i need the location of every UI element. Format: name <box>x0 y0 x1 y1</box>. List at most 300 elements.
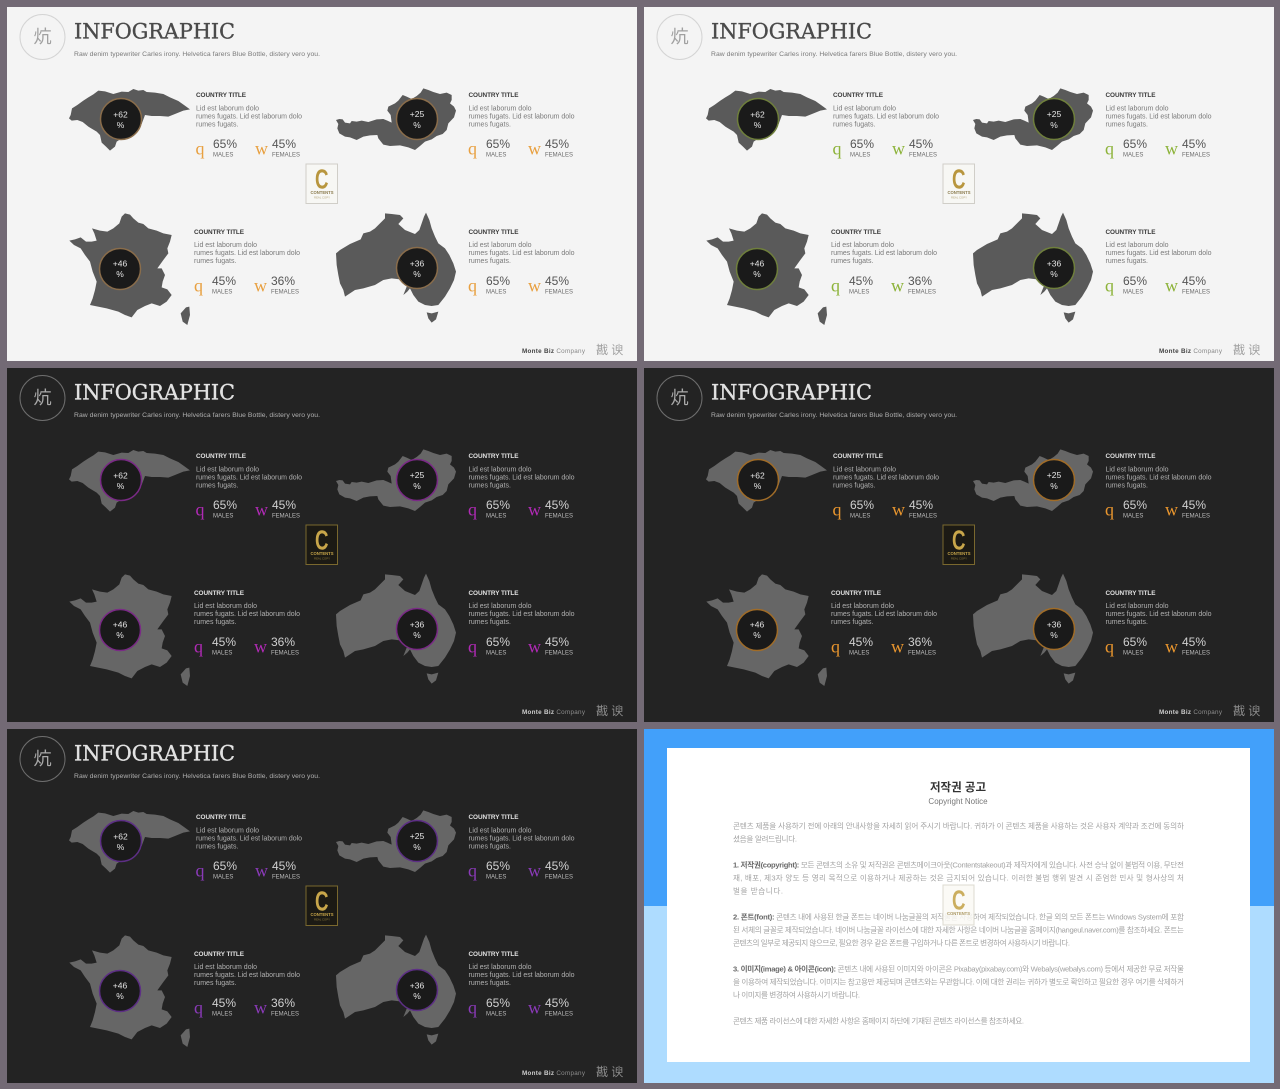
country block 2 <box>336 88 575 158</box>
country block 3: 45% <box>212 635 236 649</box>
country block 2: w <box>528 138 541 158</box>
country block 2: FEMALES <box>545 874 573 880</box>
panel: light orange <box>7 7 637 361</box>
country block 1 <box>706 89 939 158</box>
footer <box>522 1065 623 1079</box>
country block 3 <box>69 935 300 1047</box>
country block 3 <box>69 574 300 686</box>
section 2: 콘텐츠의 일부로 제공되지 않으므로, 필요한 경우 같은 폰트를 구입하거나 다른 폰트로 변경하여 사용하시기 바랍니다. <box>733 938 1070 948</box>
country block 1: 65% <box>213 137 237 151</box>
country block 4: +36 <box>410 620 424 630</box>
country block 3 <box>69 213 300 325</box>
country block 4: 65% <box>486 635 510 649</box>
country block 1: MALES <box>213 152 233 158</box>
country block 1: FEMALES <box>909 152 937 158</box>
country block 3: MALES <box>849 290 869 296</box>
country block 4 <box>973 213 1212 323</box>
country block 3: w <box>254 276 267 296</box>
country block 2: w <box>528 500 541 520</box>
country block 4: MALES <box>486 1012 506 1018</box>
header icon: 炕 <box>34 388 52 408</box>
country block 4: 65% <box>1123 274 1147 288</box>
country block 2: MALES <box>486 874 506 880</box>
country block 4 <box>336 213 575 323</box>
country block 4: Lid est laborum dolo <box>1106 242 1169 249</box>
country block 4: COUNTRY TITLE <box>1106 590 1156 597</box>
country block 4: w <box>528 276 541 296</box>
country block 1: rumes fugats. <box>196 844 238 850</box>
country block 4: MALES <box>1123 290 1143 296</box>
country block 1: q <box>196 138 204 158</box>
title: INFOGRAPHIC <box>711 19 872 44</box>
country block 3: +46 <box>113 258 127 268</box>
country block 1: +62 <box>750 470 765 480</box>
country block 2: MALES <box>1123 152 1143 158</box>
country block 3: FEMALES <box>908 650 936 656</box>
country block 1: FEMALES <box>272 874 300 880</box>
country block 2: rumes fugats. Lid est laborum dolo <box>1106 114 1212 120</box>
country block 3: FEMALES <box>271 290 299 296</box>
subtitle: Raw denim typewriter Carles irony. Helvetica farers Blue Bottle, distery vero you. <box>711 412 957 419</box>
country block 2: rumes fugats. <box>1106 122 1148 128</box>
country block 4: 45% <box>545 635 569 649</box>
country block 2: FEMALES <box>545 514 573 520</box>
country block 4: Lid est laborum dolo <box>468 964 532 971</box>
title: INFOGRAPHIC <box>74 741 235 766</box>
country block 1: w <box>892 138 905 158</box>
country block 4: COUNTRY TITLE <box>468 590 519 597</box>
panel: dark magenta <box>7 368 637 722</box>
footer: 戡 谀 <box>596 1065 623 1079</box>
country block 4: 65% <box>486 274 510 288</box>
country block 3: COUNTRY TITLE <box>194 590 245 597</box>
country block 4: Lid est laborum dolo <box>468 242 532 249</box>
logo badge: REAL COPY <box>314 196 330 200</box>
country block 1: MALES <box>213 874 233 880</box>
country block 2: % <box>1050 481 1058 491</box>
country block 2: rumes fugats. Lid est laborum dolo <box>468 836 575 842</box>
footer <box>522 343 623 357</box>
country block 3: +46 <box>750 620 764 630</box>
country block 1: +62 <box>750 110 765 120</box>
country block 1: % <box>117 481 125 491</box>
country block 4: w <box>1165 276 1178 296</box>
country block 1: 65% <box>850 498 874 512</box>
country block 2: +25 <box>1047 470 1061 480</box>
country block 4: +36 <box>1047 620 1061 630</box>
country block 2 <box>336 449 575 520</box>
country block 2: 65% <box>1123 137 1147 151</box>
country block 2: Lid est laborum dolo <box>468 828 532 834</box>
country block 1: % <box>754 120 762 130</box>
country block 3: COUNTRY TITLE <box>194 951 245 958</box>
country block 1: q <box>832 138 842 158</box>
logo badge <box>306 886 338 926</box>
country block 2: MALES <box>1123 514 1143 520</box>
country block 1: 45% <box>909 137 933 151</box>
country block 1: Lid est laborum dolo <box>833 106 896 112</box>
logo badge <box>943 164 974 204</box>
country block 3: 36% <box>271 635 295 649</box>
logo badge <box>306 164 338 204</box>
country block 4: Lid est laborum dolo <box>1106 603 1169 610</box>
country block 3 <box>706 574 937 686</box>
subtitle: Raw denim typewriter Carles irony. Helvetica farers Blue Bottle, distery vero you. <box>74 51 320 58</box>
logo badge: REAL COPY <box>314 918 330 922</box>
footer <box>1159 343 1260 357</box>
country block 2: 65% <box>486 859 510 873</box>
country block 4: q <box>1105 636 1114 656</box>
country block 2: 45% <box>545 498 569 512</box>
logo badge: C <box>952 164 966 194</box>
country block 2: rumes fugats. <box>468 844 511 850</box>
country block 2: FEMALES <box>1182 152 1210 158</box>
country block 4: FEMALES <box>545 290 573 296</box>
country block 4: rumes fugats. <box>468 619 511 626</box>
country block 1: COUNTRY TITLE <box>833 92 884 99</box>
country block 3: q <box>831 636 840 656</box>
country block 1: FEMALES <box>272 514 300 520</box>
country block 2: w <box>1165 500 1178 520</box>
country block 4: q <box>1105 276 1114 296</box>
country block 3: rumes fugats. Lid est laborum dolo <box>194 250 300 257</box>
country block 3: rumes fugats. Lid est laborum dolo <box>831 250 937 257</box>
country block 4: % <box>413 269 421 279</box>
logo badge <box>306 524 338 564</box>
header icon <box>657 14 702 60</box>
country block 2: rumes fugats. <box>468 122 511 128</box>
section 3: 나 이미지를 변경하여 사용하시기 바랍니다. <box>733 990 860 1000</box>
country block 2: q <box>1105 500 1114 520</box>
country block 4: rumes fugats. Lid est laborum dolo <box>468 611 575 618</box>
country block 1: COUNTRY TITLE <box>196 453 247 460</box>
country block 3: 36% <box>271 274 295 288</box>
country block 1: COUNTRY TITLE <box>833 453 884 460</box>
country block 3: w <box>891 276 904 296</box>
country block 4: 45% <box>1182 274 1206 288</box>
country block 3: FEMALES <box>271 1012 299 1018</box>
country block 1: COUNTRY TITLE <box>196 814 247 821</box>
footer: Monte Biz Company <box>1159 348 1223 355</box>
country block 4: q <box>468 998 477 1018</box>
country block 3: rumes fugats. <box>831 619 873 626</box>
country block 3: w <box>891 636 904 656</box>
country block 4: rumes fugats. Lid est laborum dolo <box>1106 611 1212 618</box>
country block 2: rumes fugats. Lid est laborum dolo <box>468 114 575 120</box>
country block 3: rumes fugats. Lid est laborum dolo <box>831 611 937 618</box>
country block 1: 45% <box>272 859 296 873</box>
country block 2: 45% <box>545 859 569 873</box>
country block 1: Lid est laborum dolo <box>833 466 896 474</box>
panel: light green <box>644 7 1274 361</box>
country block 1: +62 <box>113 110 128 120</box>
footer: Monte Biz Company <box>522 348 586 355</box>
section 3 <box>733 964 1184 1000</box>
logo badge: C <box>315 886 328 916</box>
country block 3: 45% <box>849 274 873 288</box>
country block 4: +36 <box>410 258 424 268</box>
panel: dark orange <box>644 368 1274 722</box>
country block 1: +62 <box>113 832 128 842</box>
country block 3: +46 <box>113 980 127 990</box>
country block 4: % <box>413 630 421 640</box>
country block 2: w <box>1165 138 1178 158</box>
country block 2 <box>336 810 575 880</box>
country block 3: 36% <box>908 635 932 649</box>
country block 4: rumes fugats. <box>1106 619 1148 626</box>
country block 3: +46 <box>113 620 127 630</box>
footer: 戡 谀 <box>596 343 623 357</box>
country block 1: rumes fugats. Lid est laborum dolo <box>196 114 302 120</box>
country block 2: rumes fugats. <box>468 482 511 490</box>
footer: 戡 谀 <box>596 704 623 718</box>
footer <box>1159 704 1260 718</box>
country block 4: rumes fugats. Lid est laborum dolo <box>1106 250 1212 257</box>
section 2: 된 서체의 글꼴로 제작되었습니다. 네이버 나눔글꼴 라이선스에 대한 자세한 사항은 네이버 나눔글꼴 홈페이지(hangeul.naver.com)를 참조하세요. 폰트는 <box>733 924 1184 934</box>
country block 3: rumes fugats. Lid est laborum dolo <box>194 972 300 979</box>
country block 4: q <box>468 636 477 656</box>
logo badge: REAL COPY <box>951 556 967 560</box>
country block 1: w <box>892 500 905 520</box>
country block 3: MALES <box>849 650 869 656</box>
country block 4: COUNTRY TITLE <box>1106 229 1156 236</box>
country block 2 <box>973 88 1212 158</box>
subtitle: Raw denim typewriter Carles irony. Helvetica farers Blue Bottle, distery vero you. <box>74 773 320 780</box>
country block 2: MALES <box>486 514 506 520</box>
country block 3: rumes fugats. <box>194 258 236 265</box>
country block 1: FEMALES <box>272 152 300 158</box>
country block 3: rumes fugats. <box>194 619 236 626</box>
country block 3: MALES <box>212 1012 232 1018</box>
country block 4 <box>336 574 575 684</box>
country block 2 <box>973 449 1212 520</box>
header icon: 炕 <box>34 27 52 47</box>
country block 2: % <box>1050 120 1058 130</box>
country block 4: FEMALES <box>545 650 573 656</box>
country block 1: w <box>255 138 268 158</box>
country block 2: 65% <box>486 498 510 512</box>
country block 1: MALES <box>850 514 870 520</box>
notice intro: 셨음을 알려드립니다. <box>733 834 797 844</box>
country block 4: rumes fugats. <box>468 258 511 265</box>
country block 3: q <box>194 636 203 656</box>
header icon: 炕 <box>34 749 52 769</box>
country block 1: q <box>196 860 204 880</box>
country block 3: rumes fugats. <box>194 980 236 987</box>
country block 2: Lid est laborum dolo <box>468 466 532 474</box>
country block 2: FEMALES <box>545 152 573 158</box>
header icon: 炕 <box>670 27 688 47</box>
country block 3: % <box>116 991 124 1001</box>
country block 3: MALES <box>212 650 232 656</box>
country block 3: q <box>194 276 203 296</box>
logo badge <box>943 884 974 925</box>
country block 1: q <box>196 500 204 520</box>
footer: 戡 谀 <box>1233 704 1260 718</box>
country block 3: +46 <box>750 258 764 268</box>
title: INFOGRAPHIC <box>74 19 235 44</box>
country block 3: 36% <box>908 274 932 288</box>
country block 1: rumes fugats. Lid est laborum dolo <box>833 114 939 120</box>
country block 1: COUNTRY TITLE <box>196 92 247 99</box>
country block 1: rumes fugats. Lid est laborum dolo <box>196 836 302 842</box>
country block 2: Lid est laborum dolo <box>1106 106 1169 112</box>
country block 3: q <box>194 998 203 1018</box>
country block 2: COUNTRY TITLE <box>468 92 519 99</box>
country block 1: 65% <box>213 859 237 873</box>
country block 2: rumes fugats. <box>1106 482 1148 490</box>
notice intro: 콘텐츠 제품을 사용하기 전에 아래의 안내사항을 자세히 읽어 주시기 바랍니다. 귀하가 이 콘텐츠 제품을 사용하는 것은 사용자 계약과 조건에 동의하 <box>733 820 1184 830</box>
section 2 <box>733 912 1184 948</box>
country block 1: 65% <box>213 498 237 512</box>
country block 3: COUNTRY TITLE <box>831 590 882 597</box>
country block 2: Lid est laborum dolo <box>1106 466 1169 474</box>
country block 3: rumes fugats. Lid est laborum dolo <box>194 611 300 618</box>
logo badge: REAL COPY <box>314 556 330 560</box>
logo badge: REAL COPY <box>951 196 967 200</box>
country block 4: w <box>528 998 541 1018</box>
country block 4: MALES <box>486 290 506 296</box>
country block 4: COUNTRY TITLE <box>468 951 519 958</box>
country block 2: q <box>468 500 477 520</box>
country block 1: q <box>832 500 842 520</box>
country block 4: 65% <box>486 996 510 1010</box>
logo badge: C <box>315 164 328 194</box>
footer: Monte Biz Company <box>522 1070 586 1077</box>
logo badge: CONTENTS <box>310 190 334 195</box>
country block 4: rumes fugats. Lid est laborum dolo <box>468 250 575 257</box>
country block 3: 36% <box>271 996 295 1010</box>
country block 4: +36 <box>1047 258 1061 268</box>
country block 1: % <box>754 481 762 491</box>
country block 3: % <box>753 630 761 640</box>
subtitle: Raw denim typewriter Carles irony. Helvetica farers Blue Bottle, distery vero you. <box>74 412 320 419</box>
footer: 戡 谀 <box>1233 343 1260 357</box>
header icon <box>20 14 65 60</box>
country block 4: q <box>468 276 477 296</box>
country block 1 <box>706 450 939 520</box>
country block 4: 45% <box>1182 635 1206 649</box>
country block 4: w <box>1165 636 1178 656</box>
country block 3 <box>706 213 937 325</box>
country block 2: +25 <box>1047 109 1061 119</box>
title: INFOGRAPHIC <box>74 380 235 405</box>
country block 3: MALES <box>212 290 232 296</box>
country block 3: FEMALES <box>908 290 936 296</box>
country block 4: FEMALES <box>1182 650 1210 656</box>
country block 3: w <box>254 636 267 656</box>
country block 1: 45% <box>909 498 933 512</box>
country block 3: rumes fugats. <box>831 258 873 265</box>
country block 1: w <box>255 500 268 520</box>
country block 3: Lid est laborum dolo <box>831 242 894 249</box>
country block 1: rumes fugats. <box>196 122 238 128</box>
country block 2: COUNTRY TITLE <box>468 453 519 460</box>
country block 1 <box>69 811 302 880</box>
country block 4: % <box>1050 630 1058 640</box>
country block 2: +25 <box>410 109 424 119</box>
notice heading: 저작권 공고 <box>930 780 986 794</box>
country block 1: 45% <box>272 137 296 151</box>
country block 2: 65% <box>1123 498 1147 512</box>
country block 4: % <box>413 991 421 1001</box>
country block 1: % <box>117 120 125 130</box>
country block 3: COUNTRY TITLE <box>194 229 245 236</box>
country block 4: COUNTRY TITLE <box>468 229 519 236</box>
footer <box>522 704 623 718</box>
country block 4: 65% <box>1123 635 1147 649</box>
country block 1: MALES <box>850 152 870 158</box>
notice intro <box>733 820 1184 844</box>
logo badge: CONTENTS <box>947 911 970 916</box>
country block 3: Lid est laborum dolo <box>194 242 257 249</box>
logo badge: CONTENTS <box>310 551 334 556</box>
country block 1: Lid est laborum dolo <box>196 828 259 834</box>
country block 3: Lid est laborum dolo <box>831 603 894 610</box>
country block 1: Lid est laborum dolo <box>196 106 259 112</box>
country block 4: FEMALES <box>1182 290 1210 296</box>
section 1 <box>733 860 1184 896</box>
country block 1: rumes fugats. <box>833 482 875 490</box>
country block 3: w <box>254 998 267 1018</box>
country block 4: Lid est laborum dolo <box>468 603 532 610</box>
country block 4: rumes fugats. <box>1106 258 1148 265</box>
country block 1: FEMALES <box>909 514 937 520</box>
country block 2: q <box>1105 138 1114 158</box>
panel: copyright notice <box>644 729 1274 1083</box>
panel: dark purple <box>7 729 637 1083</box>
country block 1: rumes fugats. Lid est laborum dolo <box>833 474 939 482</box>
country block 2: % <box>413 481 421 491</box>
country block 1: MALES <box>213 514 233 520</box>
logo badge: C <box>952 884 966 916</box>
country block 2: rumes fugats. Lid est laborum dolo <box>468 474 575 482</box>
country block 4 <box>336 935 575 1045</box>
country block 2: 45% <box>1182 498 1206 512</box>
country block 1: % <box>117 842 125 852</box>
country block 1: rumes fugats. Lid est laborum dolo <box>196 474 302 482</box>
country block 1: w <box>255 860 268 880</box>
section 1: 벌을 받습니다. <box>733 886 783 896</box>
country block 4: MALES <box>486 650 506 656</box>
country block 2: COUNTRY TITLE <box>468 814 519 821</box>
country block 2: +25 <box>410 831 424 841</box>
country block 3: COUNTRY TITLE <box>831 229 882 236</box>
section 1: 재, 배포, 제3자 양도 등 영리 목적으로 이용하거나 제공하는 것은 금지되어 있습니다. 이러한 불법 행위 발견 시 준엄한 민사 및 형사상의 처 <box>733 872 1184 882</box>
country block 2: Lid est laborum dolo <box>468 106 532 112</box>
country block 4: 45% <box>545 996 569 1010</box>
country block 3: Lid est laborum dolo <box>194 603 257 610</box>
country block 4: FEMALES <box>545 1012 573 1018</box>
logo badge: CONTENTS <box>310 912 334 917</box>
subtitle: Raw denim typewriter Carles irony. Helvetica farers Blue Bottle, distery vero you. <box>711 51 957 58</box>
country block 3: FEMALES <box>271 650 299 656</box>
title: INFOGRAPHIC <box>711 380 872 405</box>
country block 1: +62 <box>113 470 128 480</box>
closing note: 콘텐츠 제품 라이선스에 대한 자세한 사항은 홈페이지 하단에 기재된 콘텐츠 라이선스를 참조하세요. <box>733 1016 1024 1026</box>
country block 3: 45% <box>849 635 873 649</box>
country block 2: % <box>413 120 421 130</box>
country block 3: 45% <box>212 996 236 1010</box>
header icon <box>20 736 65 782</box>
country block 1: rumes fugats. <box>833 122 875 128</box>
country block 1: rumes fugats. <box>196 482 238 490</box>
country block 2: q <box>468 138 477 158</box>
country block 1: Lid est laborum dolo <box>196 466 259 474</box>
country block 1 <box>69 450 302 520</box>
logo badge: C <box>315 524 328 556</box>
header icon <box>20 376 65 420</box>
